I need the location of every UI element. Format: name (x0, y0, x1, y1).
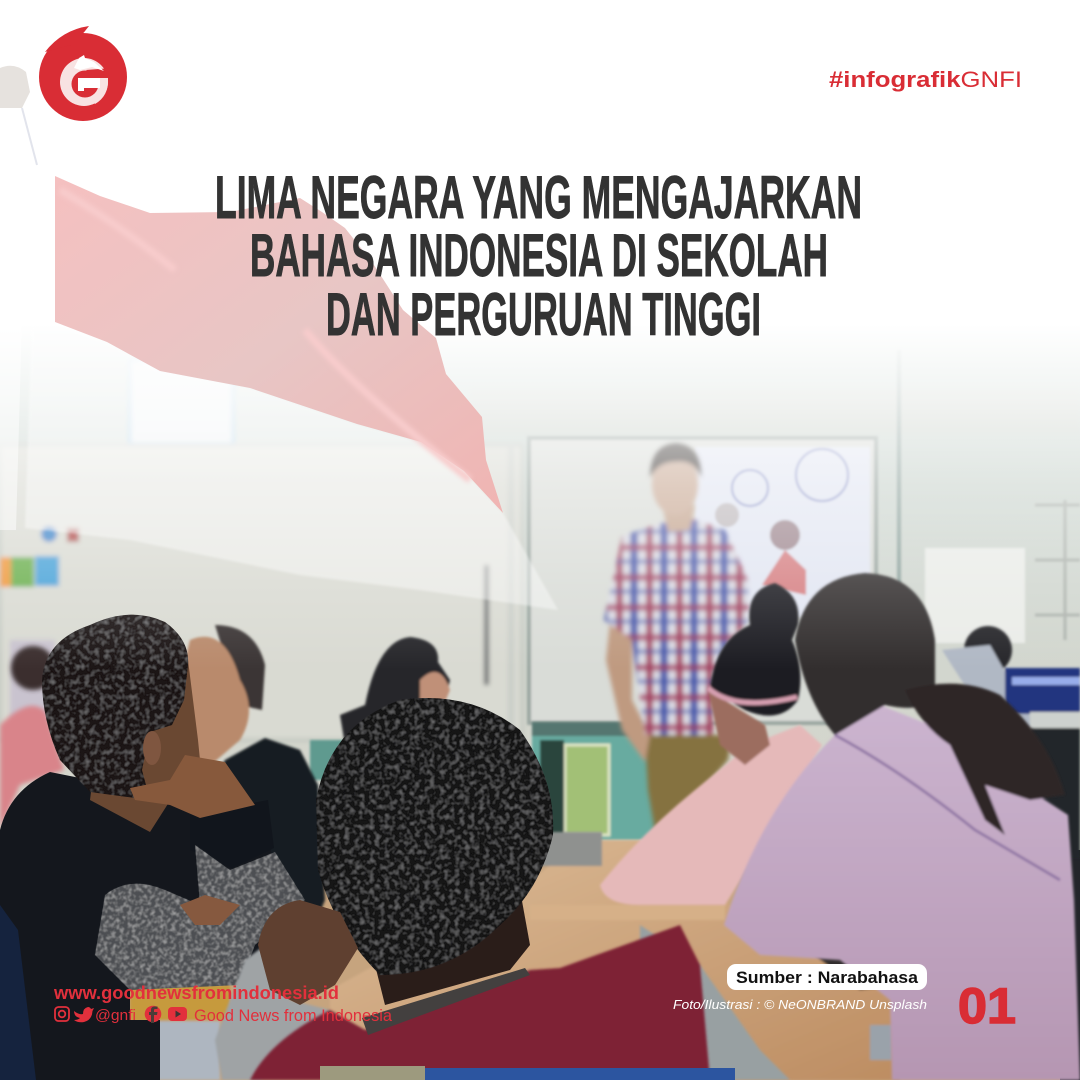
logo red disc (39, 33, 127, 121)
right girl lilac hoodie (724, 573, 1080, 1080)
girl in black sweater left (170, 625, 325, 960)
flag pole (0, 100, 28, 530)
hair ponytail (905, 684, 1065, 835)
social row (55, 1006, 393, 1025)
boy hand on arm (180, 895, 240, 925)
teacher hair (650, 443, 701, 478)
photo: classroom background (0, 300, 1080, 1080)
curly hair afro (316, 698, 553, 975)
logo white emblem ring (60, 58, 108, 106)
teacher shirt (604, 518, 750, 735)
icon: facebook (145, 1006, 161, 1023)
page number: 01 (958, 978, 1016, 1034)
flag red stripe (55, 176, 503, 513)
teacher face (652, 453, 698, 515)
boy hand at chin (130, 755, 255, 818)
head neck (370, 890, 530, 1005)
handle: @gnfi (95, 1007, 136, 1024)
student maroon jacket foreground (215, 698, 790, 1080)
source label (727, 964, 927, 990)
logo G bar (78, 78, 100, 91)
middle girl headband (708, 688, 797, 703)
boy grey knit sleeve (95, 845, 305, 990)
teacher (604, 443, 750, 832)
lower base tone (0, 850, 1080, 1080)
logo eagle head (74, 55, 104, 71)
page name: Good News from Indonesia (194, 1007, 393, 1025)
icon: instagram (55, 1007, 69, 1021)
hoodie body (724, 705, 1080, 1080)
logo right ring segment (90, 78, 108, 104)
middle girl face (708, 690, 770, 765)
hair head (795, 573, 935, 735)
hashtag: #infografik GNFI (829, 67, 1022, 92)
logo (39, 26, 127, 121)
student pink sweater far left (0, 646, 64, 830)
boy neck and face (90, 660, 200, 832)
hand behind head (258, 900, 358, 1005)
flag pole rope (22, 108, 37, 165)
title: DAN PERGURUAN TINGGI (326, 281, 761, 348)
logo red centre (72, 70, 98, 98)
middle girl pink sweater (600, 583, 822, 905)
jacket body (250, 925, 710, 1080)
boy sleeve cuff (190, 800, 274, 868)
flag fold highlights (60, 190, 470, 480)
flag pole finial (0, 66, 30, 108)
right edge dark furniture (1060, 850, 1080, 1080)
classroom wall details and pinned posters (0, 360, 1080, 740)
boy with curly hair left (0, 615, 305, 1080)
boy dark hoodie (0, 772, 300, 1080)
boy curly hair (42, 615, 188, 800)
hoodie seam (835, 735, 1060, 880)
teal cabinet and poster (310, 722, 662, 840)
classroom wall (0, 300, 1080, 860)
boy ear (143, 731, 161, 765)
teacher trousers (645, 735, 732, 832)
flag on pole (0, 66, 558, 610)
logo swirl tip (45, 26, 89, 52)
logo gap beside eagle (86, 68, 112, 78)
middle girl hair (710, 583, 800, 716)
photo credit: Foto/Ilustrasi : © NeONBRAND Unsplash (673, 997, 927, 1012)
title (215, 164, 862, 348)
table (130, 832, 900, 1080)
whiteboard with projected picture (529, 350, 1080, 723)
icon: twitter (74, 1007, 94, 1022)
teacher neck (662, 505, 695, 532)
background student centre (340, 637, 450, 745)
source text: Sumber : Narabahasa (736, 968, 919, 987)
icon: youtube (168, 1007, 187, 1021)
flag white stripe (25, 165, 558, 610)
background student right (942, 626, 1080, 858)
jacket grey sleeve (215, 945, 330, 1080)
source pill (727, 964, 927, 990)
website url: www.goodnewsfromindonesia.id (53, 983, 339, 1003)
teacher arm (606, 622, 650, 762)
